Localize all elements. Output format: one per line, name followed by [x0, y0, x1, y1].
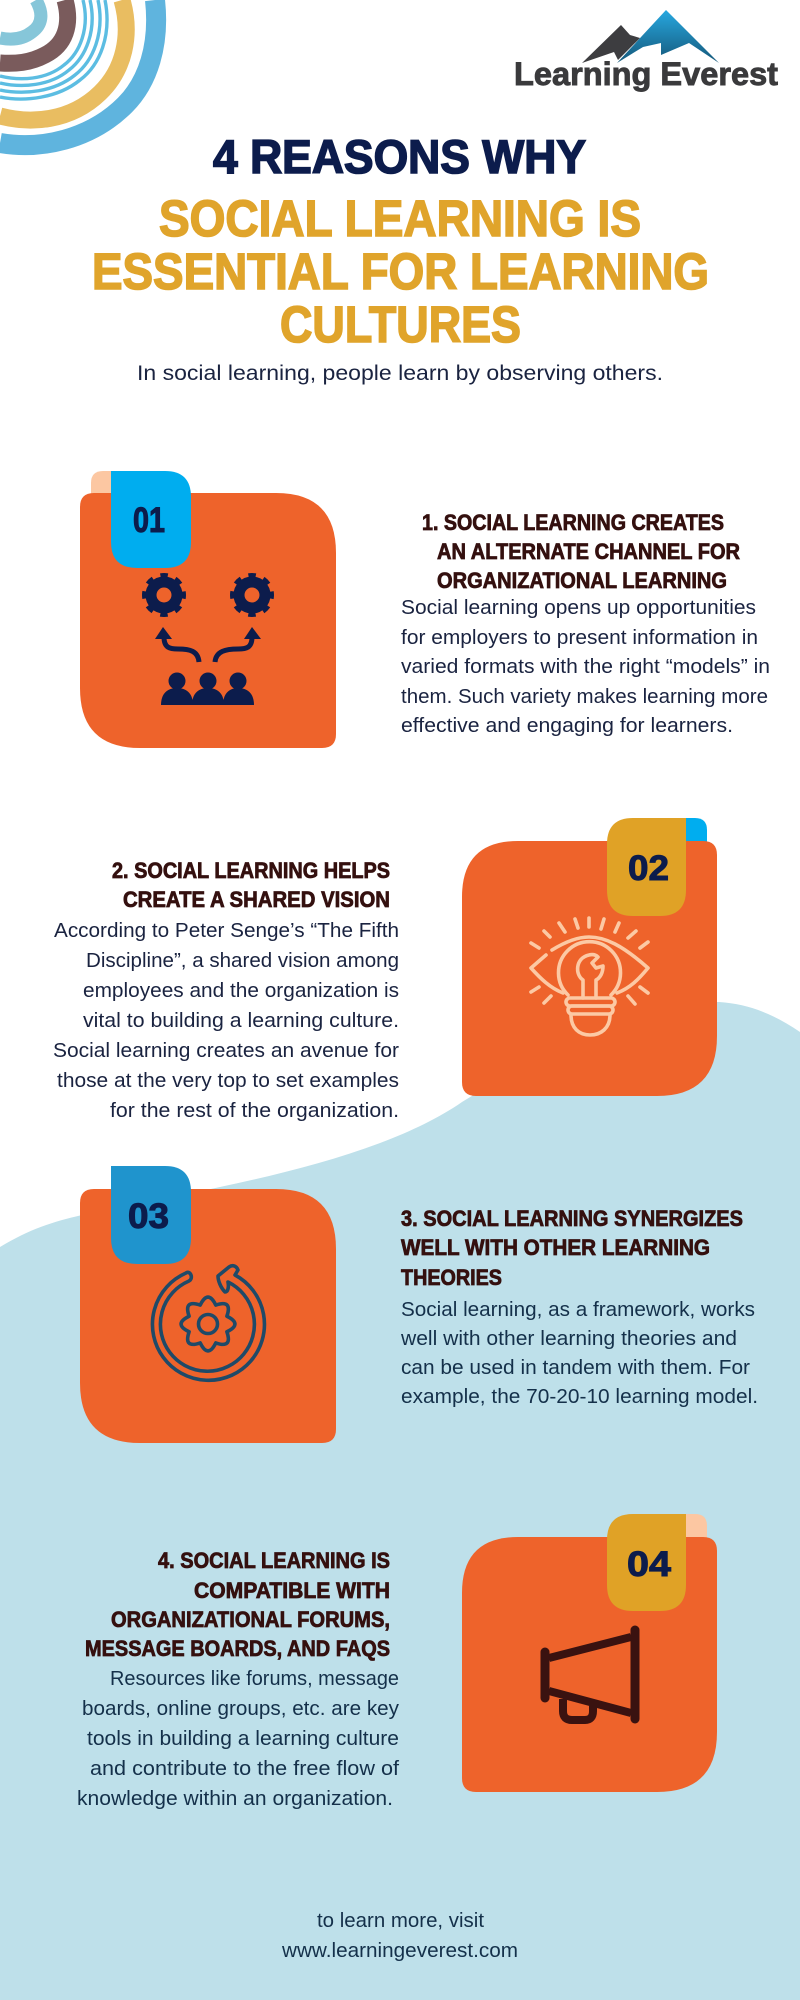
arrow right: [215, 627, 261, 662]
body 3: Social learning, as a framework, works: [401, 1299, 755, 1321]
heading 1: 1. SOCIAL LEARNING CREATES: [422, 510, 724, 535]
body 2: [53, 920, 399, 1122]
body 3: well with other learning theories and: [400, 1328, 737, 1350]
right gear: [232, 576, 272, 614]
decorative concentric rings: [0, 0, 156, 145]
orange card: [80, 493, 336, 748]
panel: card 4: [462, 1514, 717, 1792]
body 1: effective and engaging for learners.: [401, 715, 733, 737]
icon: eye with lightbulb: [531, 918, 648, 1035]
body 1: them. Such variety makes learning more: [401, 686, 768, 708]
body 2: employees and the organization is: [83, 980, 399, 1002]
panel: card 3: [80, 1166, 336, 1443]
text block: reason 3: [400, 1206, 758, 1408]
panel: card 2: [462, 818, 717, 1096]
orange card: [462, 841, 717, 1096]
body 4: Resources like forums, message: [110, 1668, 399, 1690]
body 2: those at the very top to set examples: [57, 1070, 399, 1092]
logo: Learning Everest: [514, 10, 778, 92]
heading 3: THEORIES: [401, 1265, 502, 1290]
footer line 2: website: www.learningeverest.com: [281, 1940, 518, 1962]
title line 2: SOCIAL LEARNING IS: [159, 190, 641, 247]
title line: 4 reasons why: 4 REASONS WHY: [213, 130, 586, 183]
icon: gear with cycle arrow: [152, 1266, 264, 1380]
heading 1: [422, 510, 740, 593]
footer: [281, 1910, 518, 1962]
body 4: boards, online groups, etc. are key: [82, 1698, 399, 1720]
orange card: [462, 1537, 717, 1792]
body 1: Social learning opens up opportunities: [401, 597, 756, 619]
title: [92, 130, 709, 353]
heading 2: 2. SOCIAL LEARNING HELPS: [112, 858, 390, 883]
text block: reason 4: [77, 1548, 399, 1810]
body 1: varied formats with the right “models” in: [401, 656, 770, 678]
panel: card 1: [80, 471, 336, 748]
heading 4: ORGANIZATIONAL FORUMS,: [111, 1607, 390, 1632]
body 4: [77, 1668, 399, 1810]
orange card: [80, 1189, 336, 1443]
body 2: Discipline”, a shared vision among: [86, 950, 399, 972]
body 3: example, the 70-20-10 learning model.: [401, 1386, 758, 1408]
body 2: Social learning creates an avenue for: [53, 1040, 399, 1062]
body 1: [401, 597, 770, 737]
heading 2: [112, 858, 390, 912]
peach tab accent: [91, 471, 111, 500]
heading 1: AN ALTERNATE CHANNEL FOR: [437, 539, 740, 564]
body 3: can be used in tandem with them. For: [401, 1357, 750, 1379]
number 02: 02: [628, 849, 669, 888]
blue tab accent: [686, 818, 707, 848]
body 2: for the rest of the organization.: [110, 1100, 399, 1122]
body 2: According to Peter Senge’s “The Fifth: [54, 920, 399, 942]
icon: people and gears: [144, 576, 272, 705]
number tab: [111, 1166, 191, 1264]
title line 3: ESSENTIAL FOR LEARNING: [92, 243, 709, 300]
body 1: for employers to present information in: [401, 627, 758, 649]
number tab: [111, 471, 191, 568]
body 4: tools in building a learning culture: [87, 1728, 399, 1750]
heading 3: WELL WITH OTHER LEARNING: [401, 1235, 710, 1260]
footer line 1: to learn more, visit: [317, 1910, 484, 1932]
heading 4: COMPATIBLE WITH: [194, 1578, 390, 1603]
icon: megaphone: [545, 1630, 635, 1720]
number tab: [607, 1514, 686, 1611]
heading 4: MESSAGE BOARDS, AND FAQS: [85, 1636, 390, 1661]
heading 3: [401, 1206, 743, 1290]
logo wordmark: Learning Everest: [514, 56, 778, 92]
icon: mountains: [582, 10, 719, 63]
heading 4: 4. SOCIAL LEARNING IS: [158, 1548, 390, 1573]
body 2: vital to building a learning culture.: [83, 1010, 399, 1032]
text block: reason 1: [401, 510, 770, 737]
number 04: 04: [627, 1545, 672, 1584]
peach tab accent: [686, 1514, 707, 1544]
body 4: and contribute to the free flow of: [90, 1758, 399, 1780]
background wave: [0, 1002, 800, 2000]
people: [161, 672, 254, 705]
number 01: 01: [133, 501, 165, 540]
subtitle: In social learning, people learn by observing others.: [137, 362, 663, 385]
heading 2: CREATE A SHARED VISION: [123, 887, 390, 912]
number tab: [607, 818, 686, 916]
body 3: [400, 1299, 758, 1408]
left gear: [144, 576, 184, 614]
number 03: 03: [128, 1197, 169, 1236]
heading 1: ORGANIZATIONAL LEARNING: [437, 568, 727, 593]
body 4: knowledge within an organization.: [77, 1788, 393, 1810]
arrow left: [155, 627, 199, 662]
text block: reason 2: [53, 858, 399, 1122]
heading 3: 3. SOCIAL LEARNING SYNERGIZES: [401, 1206, 743, 1231]
title line 4: CULTURES: [280, 296, 521, 353]
heading 4: [85, 1548, 390, 1661]
